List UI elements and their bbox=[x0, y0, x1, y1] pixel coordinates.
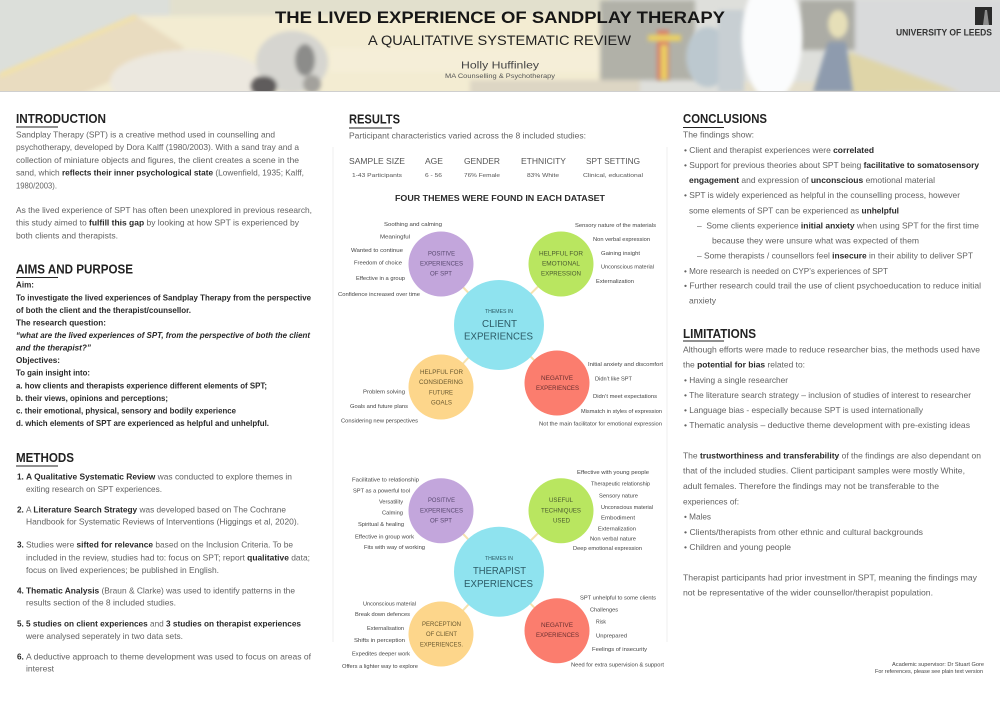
centre: therapist experiences: THEMES IN bbox=[485, 556, 513, 562]
labels: therapist theme details: Deep emotional expression bbox=[573, 546, 642, 552]
labels: therapist theme details: Embodiment bbox=[601, 516, 635, 522]
labels: client theme details: Didn’t meet expectations bbox=[593, 394, 657, 400]
text: numbered methods list: A deductive approach to theme development was used to focus on areas of bbox=[26, 652, 312, 662]
labels: client theme details: Effective in a group bbox=[356, 276, 405, 282]
labels: client theme details: Externalization bbox=[596, 279, 634, 285]
theme: negative experiences (client): EXPERIENCES bbox=[536, 385, 579, 392]
text: conclusions list: – Some therapists / counsellors feel insecure in their ability to deliver SPT bbox=[697, 252, 973, 260]
theme: positive experiences (therapist): EXPERIENCES bbox=[420, 507, 463, 514]
centre: client experiences bbox=[454, 280, 544, 370]
panel: aims and purpose bbox=[16, 262, 311, 428]
theme: useful techniques used: USEFUL bbox=[549, 497, 573, 504]
theme: useful techniques used: USED bbox=[553, 517, 570, 524]
text: introduction body: this study aimed to fulfill this gap by looking at how SPT is experienced by bbox=[16, 218, 300, 228]
centre: therapist experiences: THERAPIST bbox=[473, 565, 527, 577]
text: numbered methods list: were analysed seperately in two data sets. bbox=[25, 632, 183, 641]
participant characteristics table: Clinical, educational bbox=[583, 173, 643, 179]
text: numbered methods list: focus on lived experiences; be published in English. bbox=[26, 566, 219, 575]
theme: positive experiences (therapist): POSITIVE bbox=[428, 497, 455, 504]
participant characteristics table: SAMPLE SIZE bbox=[349, 156, 405, 166]
centre: therapist experiences bbox=[454, 527, 544, 617]
labels: client theme details: Sensory nature of the materials bbox=[575, 223, 656, 229]
theme: helpful for emotional expression bbox=[528, 232, 594, 296]
text: aims: d. which elements of SPT are experienced as helpful and unhelpful. bbox=[16, 419, 269, 428]
labels: client theme details: Wanted to continue bbox=[351, 248, 403, 254]
heading: aims and purpose: AIMS AND PURPOSE bbox=[16, 262, 133, 276]
labels: therapist theme details: Shifts in perception bbox=[354, 638, 405, 644]
text: numbered methods list: included in the review, studies had to: focus on SPT; report qualitative data; bbox=[26, 554, 310, 562]
text: introduction body: sand, which reflects their inner psychological state (Lowenfield, 1935; Kalff, bbox=[16, 168, 304, 178]
text: aims: “what are the lived experiences of SPT, from the perspective of both the client bbox=[16, 331, 310, 340]
labels: therapist theme details: Effective in group work bbox=[355, 534, 414, 540]
text: aims bbox=[16, 280, 311, 428]
panel: conclusions bbox=[683, 112, 981, 306]
text: numbered methods list: 6. bbox=[17, 652, 24, 662]
heading: limitations: LIMITATIONS bbox=[683, 327, 756, 341]
labels: therapist theme details: Offers a lighter way to explore bbox=[342, 664, 418, 670]
labels: therapist theme details: Fits with way of working bbox=[364, 545, 425, 551]
participant characteristics table: AGE bbox=[425, 156, 443, 166]
labels: client theme details: Non verbal expression bbox=[593, 237, 650, 243]
labels: therapist theme details: Spiritual & healing bbox=[358, 522, 404, 528]
header banner with blurred sand tray photo bbox=[0, 0, 1000, 91]
text: numbered methods list: 5. bbox=[17, 620, 24, 628]
theme: perception of client experiences bbox=[408, 602, 474, 666]
text: numbered methods list: Handbook for Systematic Reviews of Interventions (Higgings et al, 2020). bbox=[26, 518, 299, 526]
chart: client experiences theme map bbox=[338, 222, 663, 428]
labels: client theme details: Soothing and calming bbox=[384, 222, 442, 228]
labels: therapist theme details: SPT unhelpful to some clients bbox=[580, 596, 656, 602]
text: aims: Objectives: bbox=[16, 356, 60, 365]
text: conclusions list: • Support for previous theories about SPT being facilitative to somatosensory bbox=[684, 161, 979, 170]
text: conclusions list: • Further research could trail the use of client psychoeducation to reduce initial bbox=[684, 282, 981, 290]
labels: client theme details: Goals and future plans bbox=[350, 404, 408, 410]
theme: useful techniques used: TECHNIQUES bbox=[541, 507, 581, 514]
theme: helpful for considering future goals: GOALS bbox=[431, 400, 452, 406]
heading: introduction: INTRODUCTION bbox=[16, 112, 106, 126]
text: limitations body: Although efforts were made to reduce researcher bias, the methods used have bbox=[683, 346, 980, 354]
text: conclusions list: • SPT is widely experienced as helpful in the counselling process, however bbox=[684, 191, 960, 200]
heading: results: RESULTS bbox=[349, 112, 400, 126]
theme: useful techniques used bbox=[528, 478, 594, 543]
text: conclusions list: because they were unsure what was expected of them bbox=[712, 236, 919, 246]
participant characteristics table: 76% Female bbox=[464, 173, 500, 179]
centre: client experiences: THEMES IN bbox=[485, 309, 513, 315]
labels: therapist theme details: Effective with young people bbox=[577, 470, 649, 476]
participant characteristics table: SPT SETTING bbox=[586, 156, 640, 166]
labels: therapist theme details: Unprepared bbox=[596, 634, 627, 640]
text: limitations body: • Clients/therapists from other ethnic and cultural backgrounds bbox=[684, 528, 923, 537]
text: limitations body: • Language bias - especially because SPT is used internationally bbox=[684, 406, 924, 415]
labels: client theme details: Didn’t like SPT bbox=[595, 376, 633, 382]
text: limitations body: • Males bbox=[684, 512, 711, 522]
text: limitations body: • Thematic analysis – deductive theme development with pre-existing ideas bbox=[684, 421, 970, 430]
heading: conclusions: CONCLUSIONS bbox=[683, 112, 767, 126]
text: limitations body: experiences of: bbox=[683, 498, 739, 506]
text: conclusions list: some elements of SPT can be experienced as unhelpful bbox=[689, 206, 899, 216]
text: numbered methods list: A Qualitative Systematic Review was conducted to explore themes in bbox=[26, 472, 292, 482]
theme: helpful for emotional expression: EMOTIONAL bbox=[542, 260, 580, 268]
theme: helpful for considering future goals bbox=[408, 354, 474, 420]
labels: therapist theme details: Therapeutic relationship bbox=[591, 482, 650, 488]
theme: helpful for emotional expression: HELPFUL FOR bbox=[539, 251, 583, 258]
labels: therapist theme details: Versatility bbox=[379, 500, 403, 506]
panel: limitations bbox=[683, 327, 981, 598]
heading: methods: METHODS bbox=[16, 451, 74, 465]
footer: supervisor and references note: Academic supervisor: Dr Stuart Gore bbox=[892, 662, 984, 668]
text: limitations body: adult females. Therefore the findings may not be transferable to the bbox=[683, 482, 939, 491]
theme: negative experiences (therapist): NEGATIVE bbox=[541, 622, 574, 629]
labels: therapist theme details: Externalization bbox=[598, 526, 636, 532]
text: introduction body: As the lived experience of SPT has often been unexplored in previous research, bbox=[16, 206, 312, 215]
text: aims: c. their emotional, physical, sensory and bodily experience bbox=[16, 406, 236, 416]
labels: client theme details: Confidence increased over time bbox=[338, 292, 420, 298]
text: conclusions list bbox=[683, 130, 981, 306]
labels: client theme details: Mismatch in styles of expression bbox=[581, 409, 662, 415]
participant characteristics table: GENDER bbox=[464, 156, 500, 166]
text: numbered methods list: A Literature Search Strategy was developed based on The Cochrane bbox=[26, 506, 286, 514]
text: numbered methods list: interest bbox=[26, 664, 55, 674]
text: limitations body: • The literature search strategy – inclusion of studies of interest to researcher bbox=[684, 391, 971, 400]
text: aims: and the therapist?” bbox=[16, 344, 92, 352]
text: conclusions list: – Some clients experience initial anxiety when using SPT for the first time bbox=[697, 222, 979, 230]
theme: positive experiences (client): EXPERIENCES bbox=[420, 260, 463, 268]
author: Holly Huffinley bbox=[461, 60, 540, 72]
labels: therapist theme details: Facilitative to relationship bbox=[352, 478, 419, 484]
panel: results bbox=[338, 112, 664, 670]
labels: client theme details: Problem solving bbox=[363, 390, 405, 396]
footer: supervisor and references note: For references, please see plain text version bbox=[875, 669, 983, 675]
footer: supervisor and references note bbox=[875, 662, 984, 675]
text: numbered methods list bbox=[17, 472, 312, 674]
text: introduction body: Sandplay Therapy (SPT) is a creative method used in counselling and bbox=[16, 130, 275, 140]
labels: therapist theme details: Feelings of insecurity bbox=[592, 647, 647, 653]
participant characteristics table: 83% White bbox=[527, 173, 559, 179]
theme: helpful for considering future goals: HELPFUL FOR bbox=[420, 369, 463, 376]
text: conclusions list: anxiety bbox=[689, 296, 717, 306]
labels: client theme details: Gaining insight bbox=[601, 251, 640, 257]
labels: therapist theme details: Calming bbox=[382, 510, 403, 516]
participant characteristics table: ETHNICITY bbox=[521, 156, 566, 166]
text: aims: Aim: bbox=[16, 280, 34, 290]
labels: therapist theme details: Challenges bbox=[590, 608, 618, 614]
heading: four themes: FOUR THEMES WERE FOUND IN EACH DATASET bbox=[395, 194, 605, 203]
text: limitations body: • Having a single researcher bbox=[684, 376, 788, 385]
text: limitations body: Therapist participants had prior investment in SPT, meaning the findings may bbox=[683, 574, 978, 582]
text: introduction body: 1980/2003). bbox=[16, 182, 57, 190]
labels: therapist theme details bbox=[342, 470, 664, 670]
labels: therapist theme details: Unconscious material bbox=[601, 505, 653, 511]
text: conclusions list: engagement and expression of unconscious emotional material bbox=[689, 176, 935, 185]
labels: client theme details: Meaningful bbox=[380, 234, 410, 240]
text: conclusions list: The findings show: bbox=[683, 130, 754, 140]
labels: therapist theme details: Need for extra supervision & support bbox=[571, 662, 664, 668]
theme: positive experiences (client): POSITIVE bbox=[428, 251, 455, 258]
labels: therapist theme details: Non verbal nature bbox=[590, 536, 636, 542]
panel: methods bbox=[16, 451, 312, 674]
panel: introduction bbox=[16, 112, 312, 240]
text: introduction body: both clients and therapists. bbox=[16, 232, 118, 240]
text: numbered methods list: 2. bbox=[17, 506, 24, 514]
text: aims: b. their views, opinions and perceptions; bbox=[16, 394, 168, 403]
text: numbered methods list: Studies were sifted for relevance based on the Inclusion Criteria. To be bbox=[26, 540, 293, 550]
logo: University of Leeds bbox=[896, 7, 993, 38]
text: introduction body bbox=[16, 130, 312, 240]
chart: therapist experiences theme map bbox=[342, 470, 664, 670]
text: aims: The research question: bbox=[16, 318, 106, 328]
theme: positive experiences (client) bbox=[408, 232, 474, 296]
theme: helpful for considering future goals: CONSIDERING bbox=[419, 379, 463, 386]
theme: helpful for considering future goals: FUTURE bbox=[429, 390, 453, 396]
labels: therapist theme details: Unconscious material bbox=[363, 602, 416, 608]
labels: client theme details: Freedom of choice bbox=[354, 260, 402, 266]
author course: MA Counselling & Psychotherapy bbox=[445, 73, 556, 80]
text: numbered methods list: 5 studies on client experiences and 3 studies on therapist experiences bbox=[26, 620, 301, 628]
labels: client theme details: Unconscious material bbox=[601, 264, 654, 270]
title: THE LIVED EXPERIENCE OF SANDPLAY THERAPY bbox=[275, 8, 726, 27]
text: limitations body: • Children and young people bbox=[684, 543, 791, 552]
theme: negative experiences (client): NEGATIVE bbox=[541, 375, 574, 382]
theme: negative experiences (therapist): EXPERIENCES bbox=[536, 632, 579, 639]
centre: client experiences: EXPERIENCES bbox=[464, 330, 533, 342]
text: limitations body: The trustworthiness and transferability of the findings are also dependant on bbox=[683, 452, 981, 460]
labels: therapist theme details: Break down defences bbox=[355, 612, 410, 618]
centre: client experiences: CLIENT bbox=[482, 318, 518, 330]
labels: therapist theme details: Risk bbox=[596, 620, 606, 626]
text: limitations body bbox=[683, 346, 981, 598]
labels: therapist theme details: Expedites deeper work bbox=[352, 652, 410, 658]
theme: positive experiences (client): OF SPT bbox=[430, 271, 452, 278]
text: introduction body: psychotherapy, developed by Dora Kalff (1980/2003). With a sand tray and a bbox=[16, 143, 299, 152]
text: numbered methods list: results section of the 8 included studies. bbox=[26, 598, 176, 608]
participant characteristics table: 1-43 Participants bbox=[352, 173, 402, 179]
text: aims: To gain insight into: bbox=[16, 368, 90, 378]
participant characteristics table bbox=[349, 156, 643, 179]
theme: perception of client experiences: PERCEPTION bbox=[422, 621, 461, 628]
text: introduction body: collection of miniature objects and figures, the client creates a scene in the bbox=[16, 156, 299, 165]
centre: therapist experiences: EXPERIENCES bbox=[464, 578, 533, 590]
theme: perception of client experiences: EXPERIENCES. bbox=[420, 641, 463, 648]
text: conclusions list: • Client and therapist experiences were correlated bbox=[684, 146, 874, 155]
theme: positive experiences (therapist): OF SPT bbox=[430, 517, 452, 524]
text: results intro: Participant characteristics varied across the 8 included studies: bbox=[349, 132, 586, 140]
labels: client theme details: Not the main facilitator for emotional expression bbox=[539, 422, 662, 428]
labels: therapist theme details: SPT as a powerful tool bbox=[353, 488, 410, 494]
text: numbered methods list: 4. bbox=[17, 586, 24, 596]
text: limitations body: the potential for bias related to: bbox=[683, 360, 805, 370]
theme: helpful for emotional expression: EXPRESSION bbox=[541, 271, 581, 278]
labels: client theme details: Initial anxiety and discomfort bbox=[588, 362, 663, 368]
text: aims: of both the client and the therapist/counsellor. bbox=[16, 306, 191, 315]
text: limitations body: not be representative of the wider counsellor/therapist population. bbox=[683, 588, 933, 598]
theme: negative experiences (client) bbox=[524, 350, 590, 416]
text: numbered methods list: 3. bbox=[17, 540, 24, 550]
labels: therapist theme details: Externalisation bbox=[367, 626, 404, 632]
participant characteristics table: 6 - 56 bbox=[425, 173, 442, 179]
theme: perception of client experiences: OF CLIENT bbox=[426, 631, 457, 638]
text: conclusions list: • More research is needed on CYP’s experiences of SPT bbox=[684, 267, 888, 276]
text: limitations body: that of the included studies. Client participant samples were mostly White, bbox=[683, 466, 965, 476]
text: aims: a. how clients and therapists experience different elements of SPT; bbox=[16, 382, 267, 390]
labels: client theme details bbox=[338, 222, 663, 428]
theme: negative experiences (therapist) bbox=[524, 598, 590, 663]
text: aims: To investigate the lived experiences of Sandplay Therapy from the perspective bbox=[16, 294, 311, 302]
text: numbered methods list: 1. bbox=[17, 472, 24, 482]
labels: client theme details: Considering new perspectives bbox=[341, 418, 418, 424]
text: numbered methods list: Thematic Analysis (Braun & Clarke) was used to identify patterns in the bbox=[26, 586, 295, 596]
labels: therapist theme details: Sensory nature bbox=[599, 494, 638, 500]
text: numbered methods list: exiting research on SPT experiences. bbox=[26, 485, 162, 494]
theme: positive experiences (therapist) bbox=[408, 478, 474, 543]
subtitle: A QUALITATIVE SYSTEMATIC REVIEW bbox=[368, 33, 631, 48]
